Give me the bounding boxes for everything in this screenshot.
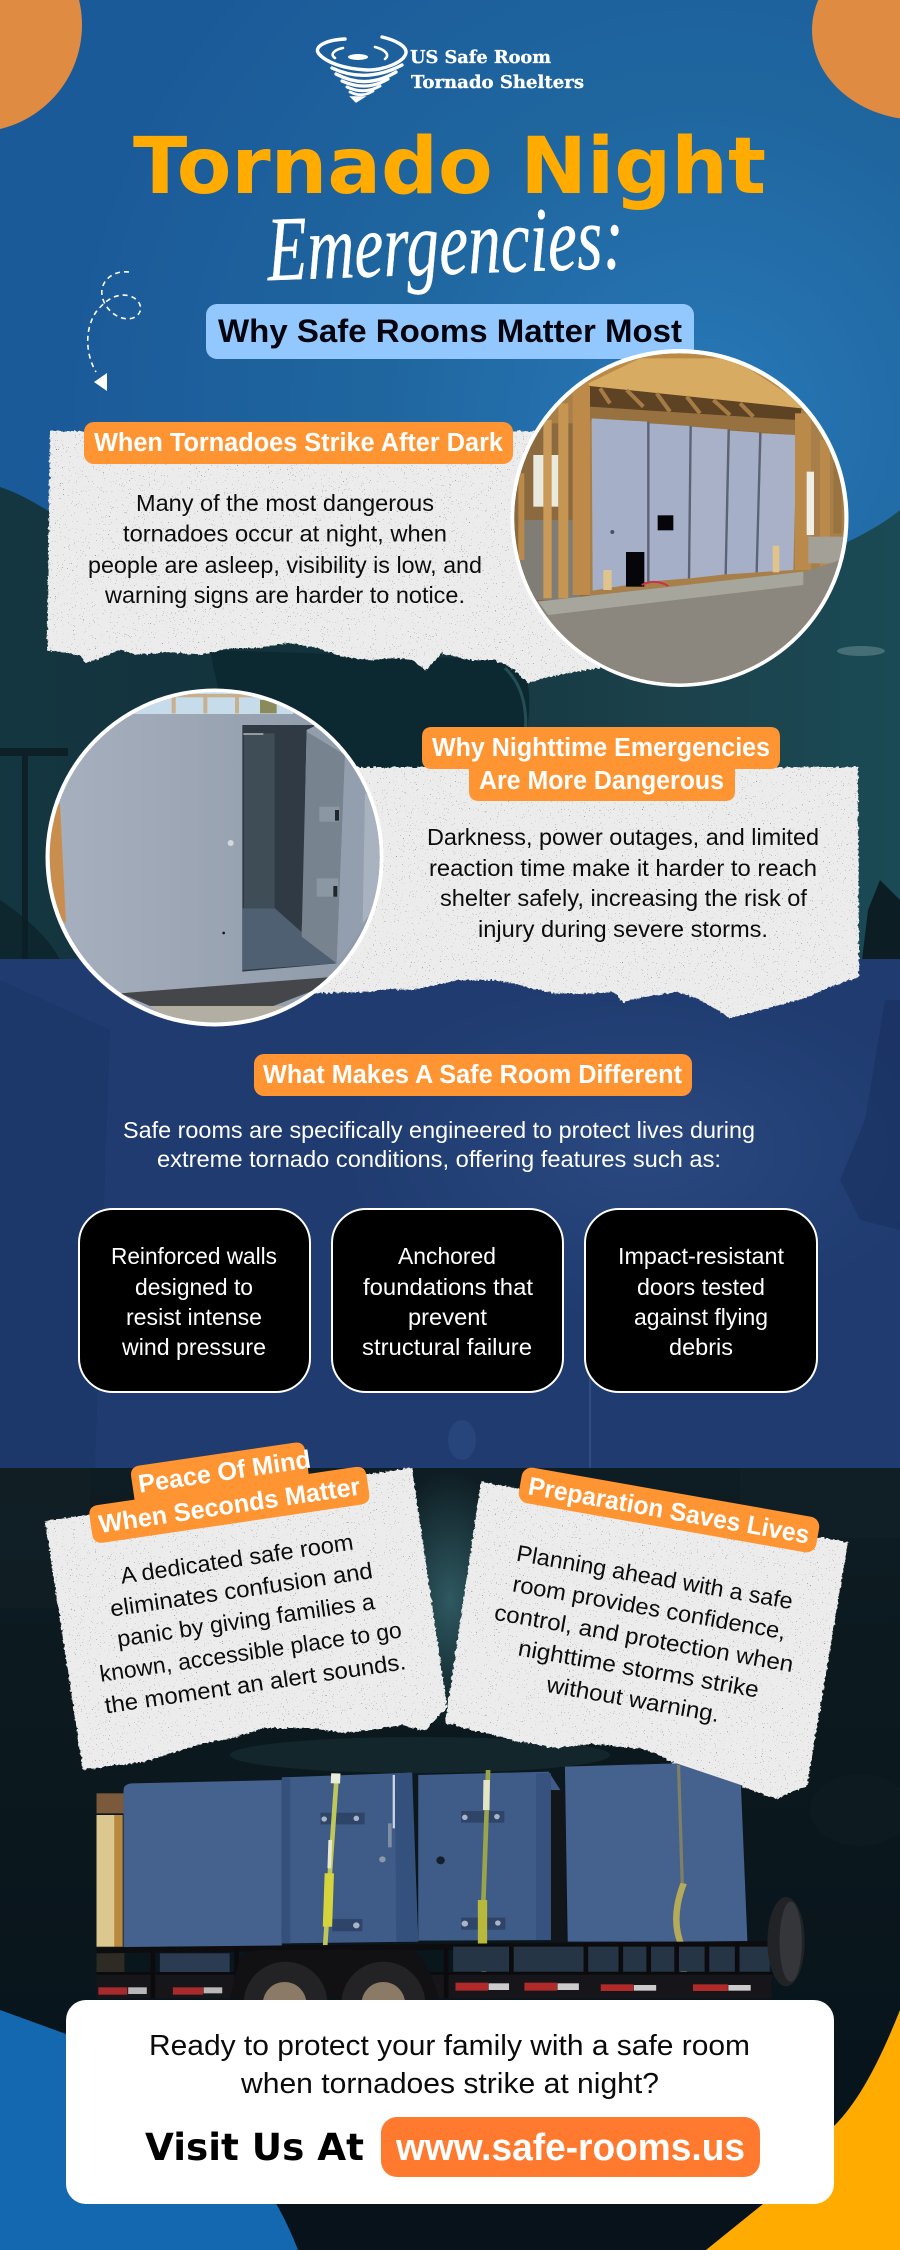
body text: Darkness, power outages, and limited	[427, 824, 819, 850]
body text: control, and protection when	[493, 1599, 795, 1677]
card: impact-resistant doors	[585, 1209, 817, 1392]
heading pill	[83, 1433, 371, 1544]
body text: tornadoes occur at night, when	[123, 520, 447, 546]
body text	[88, 490, 482, 608]
card: impact-resistant doors: debris	[669, 1334, 733, 1360]
body text: warning signs are harder to notice.	[104, 582, 465, 608]
visit us label: Visit Us At	[145, 2126, 364, 2169]
photo: open safe room door	[43, 687, 387, 1030]
body text: A dedicated safe room	[119, 1529, 355, 1589]
card: reinforced walls: Reinforced walls	[111, 1243, 277, 1269]
call to action text: Ready to protect your family with a safe room	[149, 2030, 750, 2062]
torn paper	[300, 767, 859, 1018]
body text: nighttime storms strike	[516, 1635, 761, 1703]
heading pill: Peace Of Mind	[136, 1446, 313, 1499]
heading pill: When Seconds Matter	[97, 1473, 362, 1539]
body text: shelter safely, increasing the risk of	[440, 885, 808, 911]
panel: peace of mind	[45, 1433, 447, 1770]
orange corner shape top left	[0, 0, 82, 132]
torn paper	[45, 1468, 447, 1770]
panel: when tornadoes strike after dark	[47, 422, 600, 683]
card: impact-resistant doors: Impact-resistant	[618, 1243, 785, 1269]
body text: without warning.	[544, 1671, 722, 1727]
body text: injury during severe storms.	[478, 916, 768, 942]
panel: why nighttime emergencies are more dangerous: Are More Dangerous	[479, 767, 724, 795]
logo	[317, 37, 584, 102]
body text: Many of the most dangerous	[136, 490, 434, 516]
blue corner shape bottom left	[0, 2010, 298, 2250]
card: anchored foundations: foundations that	[363, 1274, 534, 1300]
photo: safe rooms on trailer	[97, 1763, 805, 2046]
card: anchored foundations: Anchored	[398, 1243, 496, 1269]
section: what makes a safe room different: What Makes A Safe Room Different	[263, 1061, 682, 1089]
icon: tornado	[317, 37, 406, 102]
body text	[84, 1524, 408, 1718]
intro text	[123, 1117, 755, 1172]
panel: preparation saves lives	[445, 1466, 848, 1799]
gold corner shape bottom right	[706, 2010, 900, 2250]
body text: people are asleep, visibility is low, and	[88, 552, 482, 578]
logo wordmark	[410, 47, 584, 93]
intro text: Safe rooms are specifically engineered to protect lives during	[123, 1117, 755, 1143]
logo wordmark: Tornado Shelters	[411, 72, 584, 93]
card: anchored foundations: structural failure	[362, 1334, 532, 1360]
photo: safe room panels in framed building	[510, 347, 850, 690]
torn paper	[47, 431, 600, 683]
panel: when tornadoes strike after dark: When Tornadoes Strike After Dark	[94, 429, 504, 457]
subtitle pill	[206, 304, 694, 359]
body text: reaction time make it harder to reach	[429, 855, 817, 881]
card: anchored foundations: prevent	[408, 1304, 488, 1330]
orange corner shape top right	[812, 0, 900, 120]
heading pill	[254, 1054, 692, 1096]
call to action text: when tornadoes strike at night?	[240, 2068, 659, 2100]
card: reinforced walls	[79, 1209, 310, 1392]
body text	[482, 1538, 806, 1738]
website pill: www.safe-rooms.us	[395, 2127, 745, 2169]
title: Emergencies script: Emergencies:	[264, 186, 626, 300]
body text: room provides confidence,	[511, 1571, 788, 1644]
section: what makes a safe room different	[79, 1054, 817, 1392]
panel: why nighttime emergencies are more dangerous: Why Nighttime Emergencies	[432, 734, 770, 762]
call to action card	[66, 2000, 834, 2204]
card: reinforced walls: designed to	[135, 1274, 253, 1300]
intro text: extreme tornado conditions, offering features such as:	[157, 1146, 721, 1172]
website pill	[381, 2117, 760, 2177]
body text: panic by giving families a	[115, 1588, 377, 1652]
icon: dashed arrow	[88, 272, 141, 391]
panel: why nighttime emergencies are more dangerous	[300, 727, 859, 1018]
heading pill	[84, 422, 513, 464]
logo wordmark: US Safe Room	[410, 47, 551, 68]
card: anchored foundations	[332, 1209, 563, 1392]
body text	[427, 824, 819, 942]
title: Tornado Night: Tornado Night	[133, 122, 766, 212]
torn paper	[445, 1482, 848, 1799]
body text: Planning ahead with a safe	[515, 1540, 795, 1614]
card: impact-resistant doors: doors tested	[637, 1274, 765, 1300]
card: impact-resistant doors: against flying	[634, 1304, 768, 1330]
heading pill	[422, 727, 780, 801]
call to action text	[149, 2030, 750, 2100]
heading pill: Preparation Saves Lives	[526, 1472, 812, 1550]
card: reinforced walls: resist intense	[126, 1304, 262, 1330]
body text: the moment an alert sounds.	[103, 1648, 407, 1718]
subtitle pill: Why Safe Rooms Matter Most	[218, 313, 682, 349]
card: reinforced walls: wind pressure	[121, 1334, 266, 1360]
body text: eliminates confusion and	[108, 1557, 374, 1622]
body text: known, accessible place to go	[98, 1617, 403, 1687]
